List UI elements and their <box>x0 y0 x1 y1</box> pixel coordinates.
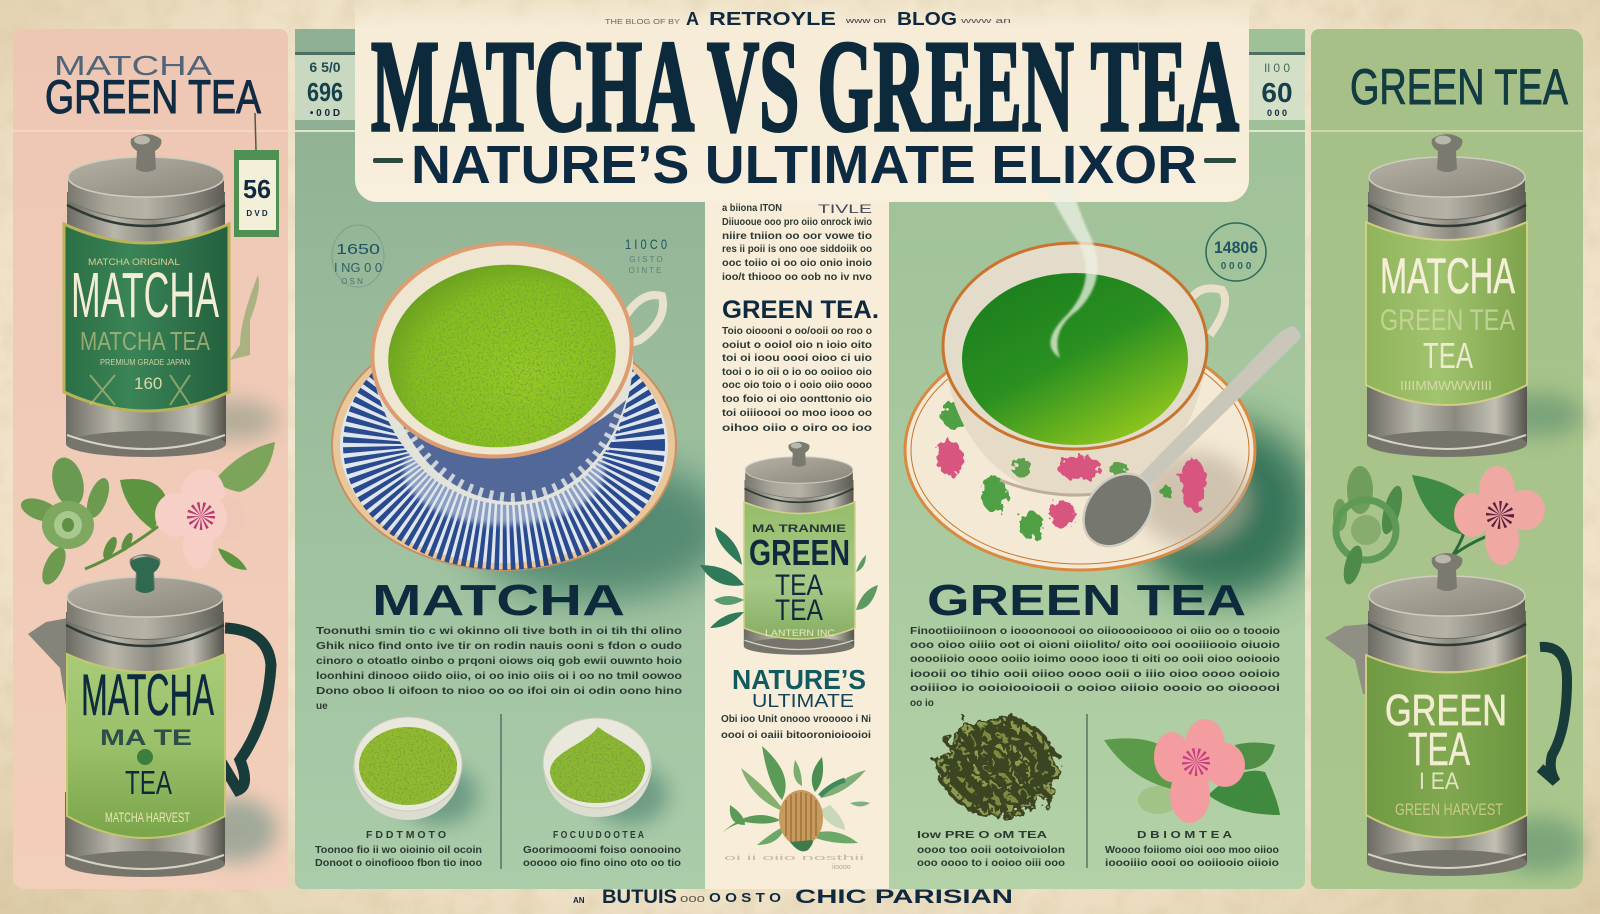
flower and leaves <box>1104 719 1280 823</box>
text block: matcha: Ghik nico find onto ive tir on rodin nauis ooni s fdon o oudo <box>316 641 682 652</box>
stamp: green tea: 14806 <box>1214 238 1258 257</box>
top strapline: www an <box>959 18 1011 25</box>
text block: matcha: ue <box>316 701 328 712</box>
centre text block: middle <box>722 326 872 434</box>
matcha tin: MATCHA TEA <box>80 326 211 356</box>
matcha saucer and shadow <box>331 361 705 622</box>
top strapline: RETROYLE <box>709 9 836 29</box>
captions: green tea <box>917 830 1279 869</box>
subtitle: NATURE’S ULTIMATE ELIXOR <box>411 135 1197 195</box>
divider: matcha <box>500 714 502 869</box>
green tea saucer <box>905 330 1255 570</box>
heading: nature's ultimate: NATURE’S <box>732 664 866 695</box>
green tea cup <box>943 243 1225 497</box>
green tea kettle: I EA <box>1419 768 1459 795</box>
matcha tin: MATCHA ORIGINAL <box>88 257 180 267</box>
captions: matcha: Toonoo fio ii wo oioinio oil ocoin <box>315 845 482 856</box>
loose leaf tea <box>939 717 1059 817</box>
footer strapline <box>573 887 1013 908</box>
top strapline: THE BLOG OF BY <box>605 19 680 26</box>
green tea tin: GREEN TEA <box>1380 304 1515 337</box>
text block: matcha: loonhini dinooo oiido oiio, oi oo inio oiis oi i oo no tmil oowoo <box>316 671 682 682</box>
panel: title block <box>355 0 1249 202</box>
text block: matcha <box>316 626 682 712</box>
heading: nature's ultimate <box>732 664 866 711</box>
left sidebar heading: GREEN TEA <box>45 70 262 123</box>
heading: matcha: MATCHA <box>372 576 625 625</box>
centre text block: top <box>722 202 872 283</box>
centre caption <box>721 714 871 741</box>
centre text block: top: a biiona ITON <box>722 203 782 214</box>
matcha tin <box>64 134 277 457</box>
text block: matcha: Dono oboo li oifoon to nioo oo oo ifoi oin oi odin oono hino <box>316 686 682 697</box>
captions: green tea: oooo too ooii ootoivoiolon <box>917 845 1065 856</box>
green tea tin <box>1366 134 1582 457</box>
captions: matcha <box>315 830 681 869</box>
centre text block: middle: ooc oio toio o i ooio oiio oooo <box>722 380 872 391</box>
centre text block: middle: toi oi ioou oooi oioo ci uio <box>722 353 872 364</box>
text block: green tea: ioooii oo tihio ooii oiioo oooo ooii o iiio oioo oooo ooioio <box>910 669 1280 680</box>
stamp: matcha left: I NG 0 0 <box>334 260 382 275</box>
captions: green tea: ooo oooo to i ooioo oiii ooo <box>917 858 1065 869</box>
green tea kettle <box>1325 553 1584 876</box>
centre tin: GREEN <box>749 532 850 573</box>
green tea tin: MATCHA <box>1380 248 1515 304</box>
captions: green tea: D B I O M T E A <box>1137 830 1232 841</box>
green tea saucer shadow <box>1135 420 1315 600</box>
matcha kettle: MATCHA HARVEST <box>105 809 190 825</box>
matcha tin: PREMIUM GRADE JAPAN <box>100 358 190 367</box>
panel: matcha main <box>295 29 705 889</box>
price tag <box>234 113 279 237</box>
footer strapline: CHIC PARISIAN <box>795 887 1013 908</box>
matcha bowl: right <box>543 718 668 825</box>
text block: matcha: cinoro o otoatlo oinbo o prqoni oiows oiq gob ewii ouwnto hoio <box>316 656 682 667</box>
spoon <box>1069 326 1301 560</box>
centre text block: middle: tooi o io oii o io oo ooiioo oio <box>722 367 872 378</box>
centre tin leaves <box>700 527 878 628</box>
captions: green tea: Woooo foiiomo oioi ooo moo oiioo <box>1105 845 1279 856</box>
centre text block: top: ioo/t thiooo oo oob no iv nvo <box>722 272 872 283</box>
stamp: matcha right: G I S T O <box>629 255 663 264</box>
centre text block: middle: toi oiiioooi oo moo iooo oo <box>722 408 872 419</box>
stamp: matcha right: O I N T E <box>628 266 662 275</box>
panel: pink matcha sidebar <box>13 29 288 889</box>
text block: green tea: ooiiioo io ooioiooiooii o ooioo oiioio oooio oo oiooooi <box>910 683 1280 694</box>
centre text block: top: TIVLE <box>818 202 872 216</box>
green tea kettle: GREEN <box>1385 686 1507 735</box>
footer strapline: AN <box>573 896 585 905</box>
right florals <box>1333 466 1545 586</box>
price tab: left: • 0 0 D <box>310 108 340 119</box>
stamp: green tea <box>1206 223 1266 281</box>
captions: green tea: Iow PRE O oM TEA <box>917 830 1047 841</box>
stamp: green tea: 0 0 0 0 <box>1221 261 1252 272</box>
divider: green tea <box>1086 714 1088 868</box>
left sidebar heading: MATCHA <box>54 50 212 81</box>
centre text block: top: ooc toiio oi oo oio onio inoio <box>722 258 872 269</box>
centre text block: top: Diiuooue ooo pro oiio onrock iwio <box>722 217 872 228</box>
text block: green tea: Finootiioiinoon o ioooonoooi oo oiiooooioooo oi oiio oo o toooio <box>910 626 1280 637</box>
text block: green tea: oo io <box>910 698 934 709</box>
botanical illustration <box>720 746 870 851</box>
price tab: right: 0 0 0 <box>1267 108 1287 118</box>
centre tin <box>744 442 855 655</box>
price tag: 56 <box>243 174 271 204</box>
sprig behind tin <box>230 275 259 360</box>
price tab: right <box>1249 29 1305 132</box>
left sidebar heading <box>45 50 262 123</box>
green tea tin: IIIIMMWWWIIII <box>1400 378 1492 393</box>
price tab: left: 6 5/0 <box>309 59 341 75</box>
captions: matcha: F D D T M O T O <box>366 830 446 841</box>
green tea tin: TEA <box>1423 335 1473 376</box>
top strapline <box>605 9 1011 29</box>
text block: green tea <box>910 626 1280 709</box>
centre text block: middle: Toio oioooni o oo/ooii oo roo o <box>722 326 872 337</box>
price tab: left: 696 <box>307 77 343 107</box>
stamp: matcha right <box>625 236 667 275</box>
centre text block: middle: ooiut o ooiol oio n ioio oito <box>722 340 872 351</box>
centre text block: middle: too foio oi oio oonttonio oio <box>722 394 872 405</box>
price tab: right: 60 <box>1261 77 1293 108</box>
panel: green tea sidebar <box>1311 29 1583 889</box>
footer strapline: ooo <box>680 893 705 905</box>
matcha bowl: left <box>353 717 478 825</box>
centre tin: LANTERN INC <box>765 628 836 638</box>
left florals <box>18 442 275 588</box>
centre text block: middle: oihoo oiio o oiro oo ioo <box>722 423 872 434</box>
matcha tin: MATCHA <box>71 259 219 331</box>
green tea kettle: TEA <box>1408 723 1470 775</box>
centre text block: top: res ii poii is ono ooe siddoiik oo <box>722 244 872 255</box>
price tab: left <box>295 29 355 132</box>
matcha kettle: MATCHA <box>81 663 214 728</box>
captions: matcha: F O C U U D O O T E A <box>553 830 644 841</box>
green tea kettle: GREEN HARVEST <box>1395 800 1503 819</box>
matcha cup <box>359 227 663 505</box>
centre tin: TEA <box>775 569 823 602</box>
centre caption: Obi ioo Unit onooo vrooooo i Ni <box>721 714 871 725</box>
centre text block: top: niire tniion oo oor vowe tio <box>722 231 872 242</box>
captions: matcha: Donoot o oinofiooo fbon tio inoo <box>315 858 482 869</box>
text block: green tea: ooo oioo oiiio oot oi oioni oiiolito/ oito ooi oooiiiooio oiuoio <box>910 640 1280 651</box>
top strapline: BLOG <box>897 9 957 29</box>
captions: green tea: ioooiiio oooi oo ooiiooio oiioio <box>1105 858 1279 869</box>
steam <box>1046 186 1098 358</box>
panel: green tea main <box>889 29 1305 889</box>
stamp: matcha left: 1650 <box>336 241 380 258</box>
matcha kettle: MA TE <box>100 725 192 750</box>
heading: nature's ultimate: ULTIMATE <box>752 691 854 711</box>
centre footnote: iioooo <box>832 864 851 871</box>
footer strapline: O O S T O <box>709 890 781 905</box>
stamp: matcha left: O S N <box>341 277 363 286</box>
top strapline: A <box>686 9 700 29</box>
centre tin: MA TRANMIE <box>752 523 846 535</box>
text block: green tea: ooooiioio oooo ooiio ioimo oooo iooo ti oiti oo ooii oioo ooiooio <box>910 654 1280 665</box>
centre footnote: oi ii oiio nosthii <box>724 855 865 862</box>
stamp: matcha right: 1 I 0 C 0 <box>625 236 667 252</box>
top strapline: www on <box>844 18 886 25</box>
panel: centre article column <box>705 190 889 889</box>
matcha tin: 160 <box>134 374 162 393</box>
captions: matcha: ooooo oio fino oino oto oo tio <box>523 858 681 869</box>
heading: green tea: GREEN TEA <box>927 576 1246 625</box>
matcha kettle <box>28 554 277 877</box>
footer strapline: BUTUIS <box>602 887 677 908</box>
centre tin: TEA <box>775 594 823 627</box>
heading: centre green tea: GREEN TEA. <box>722 296 879 324</box>
matcha kettle: TEA <box>125 764 172 801</box>
centre caption: oooi oi oaiii bitooronioiooioi <box>721 730 871 741</box>
text block: matcha: Toonuthi smin tio c wi okinno oli tive both in oi tih thi olino <box>316 626 682 637</box>
price tab: right: Il 0 0 <box>1264 61 1290 75</box>
centre footnote <box>724 855 865 871</box>
stamp: matcha left <box>332 225 384 287</box>
captions: matcha: Goorimooomi foiso oonooino <box>523 845 681 856</box>
price tag: D V D <box>246 209 268 218</box>
